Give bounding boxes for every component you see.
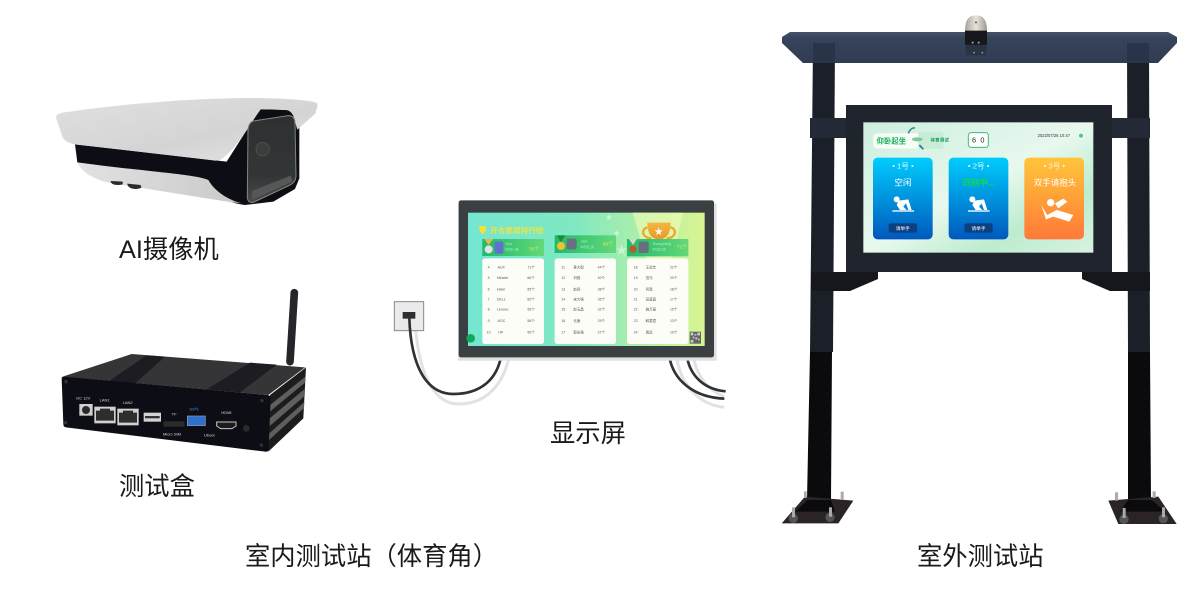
ranking title: 开合跳周排行榜 [490,225,544,235]
ranking list 1: AUX [498,266,506,270]
rank 3 card [627,239,688,256]
antenna [290,293,294,362]
box front [62,377,271,452]
port labels: HDMI [221,410,232,415]
star decorations: ★ [616,243,628,257]
lane 1 card [873,158,933,239]
lane 2 card [949,158,1008,239]
ranking list 1 [482,258,544,344]
box top [63,354,305,395]
ranking list 3: 20 [634,287,638,291]
ranking list 1: 10 [487,331,491,335]
left base plate [782,491,853,523]
ranking list 2: 15 [561,307,565,311]
camera black body [75,109,299,205]
ranking list 3: 何恩 [646,286,653,291]
ranking list 2: 44个 [598,265,606,270]
ranking list 2: 赵四 [573,286,581,291]
lane 1 card: • 1号 • [892,162,914,171]
rank 1 card: 99个 [603,242,613,248]
ranking list 1: Miracle [497,276,508,280]
rank 2 card: Tom [505,242,512,246]
ranking list 2: 长庚 [573,318,581,323]
date time: 2022/07/26 10:47 [1038,133,1071,138]
label: AI camera: AI摄像机 [119,236,219,264]
lane 3 card [1024,158,1084,239]
port labels: Uboot [204,433,216,438]
ranking list 1: 4 [488,266,490,270]
ranking list 1: 59个 [527,306,535,311]
camera lens window [247,116,296,202]
ranking list 3: 15个 [670,306,678,311]
ranking list 1: 7 [488,297,490,301]
indoor display [458,200,717,361]
ranking list 2: 14 [561,297,565,301]
left post lower [807,352,832,500]
ranking list 1: 8 [488,307,490,311]
ranking list 1: 9 [488,319,490,323]
LAN port 1 [94,407,116,423]
HDMI port [217,422,236,429]
ranking list 2 [555,258,616,344]
lane 2 card: 请举手 [972,225,986,232]
ranking list 1: 50个 [527,330,535,335]
ranking list 3: 19 [634,276,638,280]
cable shadows [416,330,724,407]
label: test box: 测试盒 [119,473,195,501]
left post upper [810,43,835,352]
app title: 体育测试 [930,137,949,144]
rank 1 card: Jam [581,239,588,243]
ranking list 3: 王此年 [646,265,657,270]
lane 3 card: • 3号 • [1044,162,1065,171]
ranking list 2: 13 [561,287,565,291]
ranking list 3: 施万豪 [646,306,657,311]
app title [873,128,949,149]
ranking list 3: 周此 [646,330,653,335]
ranking list 3: 24 [634,331,638,335]
right cables [669,357,726,399]
camera lens floor [252,176,293,200]
right base plate [1108,491,1177,524]
port labels [76,395,232,438]
ranking list 2: 29个 [598,318,606,323]
ranking list 3: 10个 [670,330,678,335]
lane 2 card: • 2号 • [968,162,990,171]
light beam [633,213,683,260]
ranking list 1: 66个 [527,275,535,280]
label: outdoor station: 室外测试站 [917,543,1044,571]
countdown: 6 [972,136,976,145]
ranking list 2: 38个 [598,286,606,291]
post tops on roof [813,43,1149,63]
QR code [690,332,701,344]
ranking list 2: 16 [561,319,565,323]
star decorations: ★ [606,214,613,221]
lane 2 card: 识别中... [962,176,995,187]
right post lower [1128,352,1151,500]
status dot [1078,133,1084,138]
ranking list 1: HP [498,331,504,335]
display frame [459,200,714,357]
LAN port 2 inner [119,411,137,423]
ranking list 3: 13个 [670,318,678,323]
ranking list 1: Lenovo [497,307,508,311]
port labels: Micro SIM [163,432,181,437]
ranking list 2: 12 [561,276,565,280]
ranking list 2: 赵玉昌 [573,306,584,311]
ranking list 1: DELL [497,297,506,301]
ranking list 1: 71个 [527,265,535,270]
port labels: SS⇆ [189,406,199,412]
rank 1 card [555,235,616,253]
ranking list 2: 郭永强 [573,330,584,335]
DC jack [79,404,93,416]
trophy: ★ [654,226,663,236]
star decorations [606,214,628,257]
display screen [466,213,705,346]
back button [466,334,475,343]
upper cross bars [810,118,1150,138]
rank 2 card: 78个 [529,247,539,253]
front screws [64,380,264,447]
box top dark bands [107,355,277,392]
ranking list 1: 65个 [527,286,535,291]
socket plug [403,312,415,319]
ranking list 1: 60个 [527,296,535,301]
ranking list 2: 32个 [598,306,606,311]
ranking list 2: 宋大强 [573,296,584,301]
star decorations: ★ [613,230,620,237]
camera hood [56,98,317,161]
USB port [144,413,161,422]
ranking list 2: 40个 [598,275,606,280]
power cable [409,318,501,394]
rank 3 card: 72个 [677,245,687,251]
port labels: LAN2 [123,400,133,405]
LAN port 1 inner [96,409,114,421]
ranking list 2: 刘毅 [573,275,581,280]
ranking list 3: 22 [634,307,638,311]
SIM slot [163,421,185,427]
countdown [968,133,988,147]
ranking list 3: 田蓝蓝 [646,296,657,301]
port labels: TF [172,411,177,416]
trophy [643,223,675,239]
display shadow [458,203,717,361]
camera lower shell [77,162,242,203]
lane 1 card: 空闲 [894,176,912,187]
ranking list 2: 黄大毅 [573,265,584,270]
camera lens circle [256,142,269,156]
audio jack [243,425,250,432]
countdown: 0 [980,136,984,145]
ranking list 3: 20个 [670,275,678,280]
ranking list 3: 17个 [670,296,678,301]
ranking list 3: 韩君君 [646,318,657,323]
rank 3 card: 中华第三跳 [652,248,666,252]
ranking list 1: AOC [498,319,506,323]
port labels: LAN1 [100,398,110,403]
AI camera [56,98,317,205]
lane 1 card: 请举手 [896,225,910,232]
roof beam [782,32,1177,63]
ranking list 2: 17 [561,331,565,335]
socket plate [394,302,424,331]
port labels: DC 12V [76,395,91,400]
ranking list 3: 23 [634,319,638,323]
label: display: 显示屏 [550,420,626,448]
rank 2 card: 中华第一跳 [505,248,519,252]
outdoor screen content [863,122,1093,253]
ranking list 3: 18个 [670,286,678,291]
ranking list 1: 5 [488,276,490,280]
ranking list 2: 35个 [598,296,606,301]
box side stripes [269,377,305,440]
ranking list 3: 21 [634,297,638,301]
sensor on roof [965,15,987,55]
ranking list 2: 11 [561,266,565,270]
ranking list 3: 18 [634,266,638,270]
rank 2 card [482,239,544,256]
outdoor screen cabinet [846,105,1112,272]
ranking list 3: 范冯 [646,275,653,280]
lane 3 card: 双手请抱头 [1034,177,1077,187]
ranking list 1: 58个 [527,318,535,323]
label: indoor station: 室内测试站（体育角） [245,543,498,571]
outdoor station [782,15,1177,524]
wall socket and cables [394,302,726,407]
ranking list 3: 22个 [670,265,678,270]
USB3 port [187,416,205,426]
right post upper [1127,43,1150,352]
LAN port 2 [117,409,139,425]
ranking list 3 [627,258,688,344]
box side [268,367,306,452]
camera mounts [111,181,141,189]
rank 3 card: Zhangming [652,242,671,246]
test box [62,293,306,452]
ranking list 1: 6 [488,287,490,291]
app title: 仰卧起坐 [877,136,907,145]
rank 1 card: 中华第二跳 [581,245,594,249]
lower brackets [811,272,1150,291]
ranking list 2: 27个 [598,330,606,335]
ranking list 1: Haier [497,287,506,291]
